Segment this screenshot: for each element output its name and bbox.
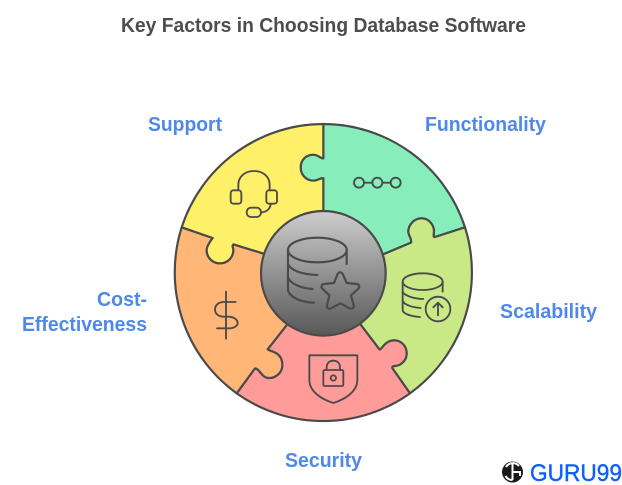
hub circle — [261, 211, 386, 336]
label: Scalability: Scalability — [500, 301, 598, 323]
label: Support: Support — [148, 114, 222, 136]
label: Security: Security — [285, 450, 363, 472]
label: Functionality: Functionality — [425, 114, 547, 136]
icon: shield with padlock — [309, 355, 357, 403]
panel: cost-effectiveness piece — [175, 227, 323, 393]
title: Key Factors in Choosing Database Software — [121, 15, 526, 37]
panel: security piece — [237, 273, 410, 421]
panel: functionality piece — [301, 124, 465, 273]
panel: scalability piece — [323, 218, 472, 393]
label: Cost-Effectiveness — [22, 289, 147, 336]
label: Cost-Effectiveness: Cost- — [97, 289, 147, 311]
panel: support piece — [182, 124, 323, 273]
icon: connected nodes — [354, 178, 401, 188]
icon: headset — [231, 171, 277, 217]
icon: database with up arrow — [403, 273, 450, 321]
icon: dollar sign — [215, 292, 238, 339]
icon: database with star — [288, 238, 359, 309]
icon: logo mark — [502, 462, 523, 482]
puzzle wheel — [175, 124, 472, 421]
label: Cost-Effectiveness: Effectiveness — [22, 314, 147, 336]
